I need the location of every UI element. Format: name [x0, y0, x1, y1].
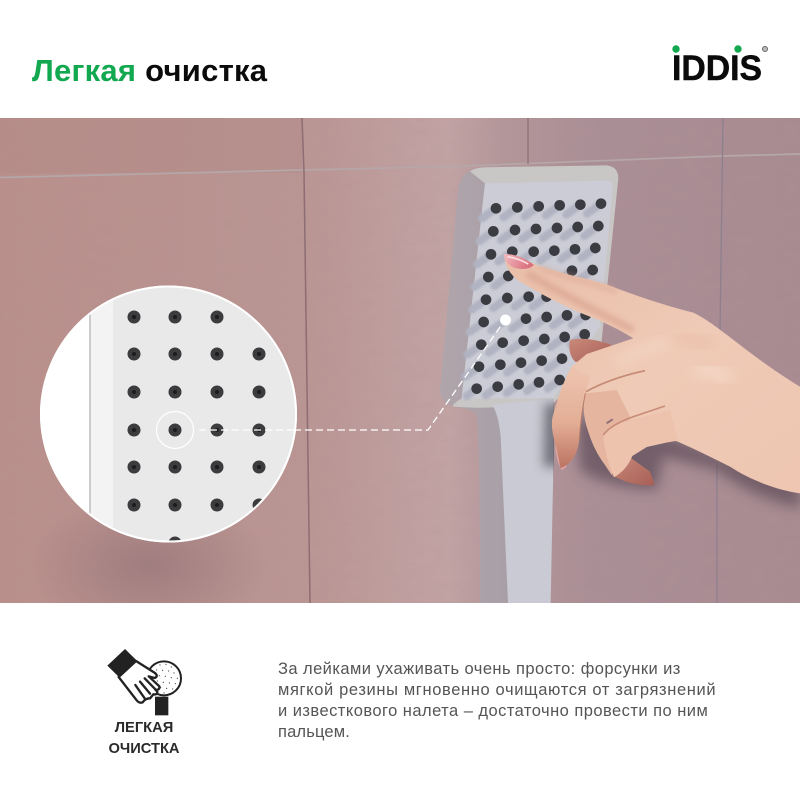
icon label: ЛЕГКАЯ	[115, 720, 173, 736]
icon part: shower head	[147, 661, 181, 715]
description text: пальцем.	[278, 723, 350, 741]
description text: и известкового налета – достаточно провести по ним	[278, 702, 708, 720]
hand	[504, 254, 800, 508]
icon label: ОЧИСТКА	[108, 741, 180, 757]
description text: мягкой резины мгновенно очищаются от загрязнений	[278, 681, 716, 699]
photo: shower head on tiled wall with hand	[0, 118, 800, 603]
tiled wall	[0, 118, 800, 640]
title: Легкая очистка	[32, 53, 267, 88]
icon part: hand	[119, 661, 159, 703]
logo: IDDIS: IDDIS	[672, 48, 762, 88]
magnifier: nozzle close-up	[40, 280, 303, 550]
icon part: cuff	[107, 649, 137, 677]
icon: hand cleaning shower head	[107, 649, 182, 716]
callout leader: dashed line	[195, 320, 505, 430]
description text: За лейками ухаживать очень просто: форсунки из	[278, 660, 681, 678]
callout point: white dot on nozzle	[500, 314, 511, 326]
description text	[278, 660, 716, 741]
icon label	[108, 720, 180, 757]
shower head	[440, 165, 618, 603]
